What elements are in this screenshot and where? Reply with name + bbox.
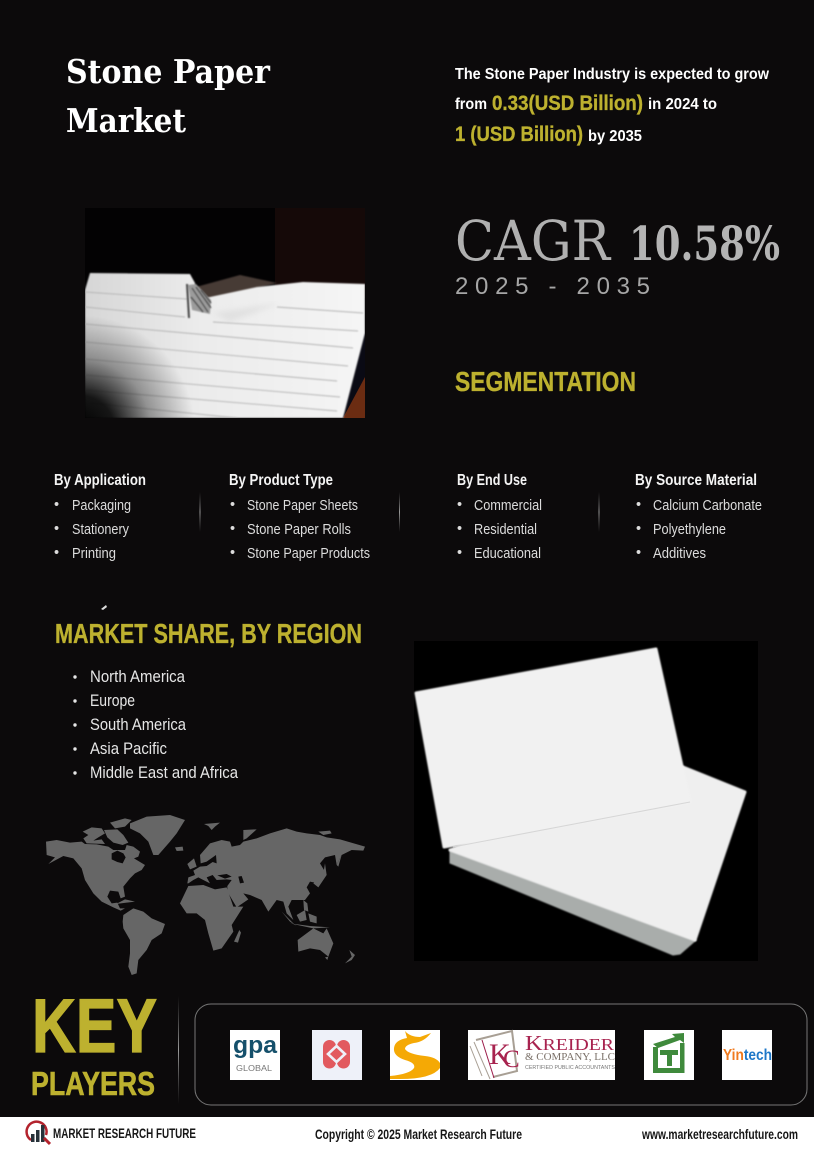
growth summary text: by 2035 <box>588 128 642 145</box>
icon: market research future magnifier <box>27 1122 50 1144</box>
segment column: by end use: Residential <box>474 522 537 538</box>
CAGR statistic <box>455 209 780 300</box>
CAGR statistic: 2025 - 2035 <box>455 273 650 300</box>
region list: Europe <box>90 691 135 710</box>
region list: North America <box>90 667 185 686</box>
segment column: by application: Packaging <box>72 498 131 514</box>
segment column: by product type: Stone Paper Products <box>247 546 370 562</box>
growth summary text: 1 (USD Billion) <box>455 123 583 146</box>
title: Market <box>66 101 187 140</box>
segment column: by product type: • <box>230 521 235 537</box>
CAGR statistic: CAGR <box>455 209 611 273</box>
logo: Kreider and Company: KREIDER <box>525 1031 615 1055</box>
segment column: by application: Stationery <box>72 522 130 538</box>
segment column: by source material <box>635 472 762 562</box>
logo: gpa global <box>230 1030 280 1080</box>
segment column: by end use: By End Use <box>457 472 527 489</box>
segment column: by source material: Additives <box>653 546 706 562</box>
photo: stacked blank stone paper cards <box>414 641 758 961</box>
heading: key players: PLAYERS <box>31 1065 155 1102</box>
logo: red diamond mark <box>312 1030 362 1080</box>
growth summary text: in 2024 to <box>648 96 717 113</box>
photo: creased stone paper sheet <box>85 208 365 420</box>
logo: Kreider and Company <box>468 1030 616 1080</box>
growth summary text: from <box>455 96 487 113</box>
segment column: by product type: • <box>230 545 235 561</box>
title <box>66 52 271 140</box>
key players panel <box>195 1004 807 1105</box>
logo: Yintech <box>722 1030 772 1080</box>
footer bar <box>0 1117 814 1150</box>
region list: Asia Pacific <box>90 739 167 758</box>
segment column: by end use: Educational <box>474 546 541 562</box>
heading: market share by region: MARKET SHARE, BY REGION <box>55 618 362 649</box>
segment column: by source material: • <box>636 497 641 513</box>
region list: Middle East and Africa <box>90 763 238 782</box>
logo: Kreider and Company: & COMPANY, LLC <box>525 1051 615 1063</box>
logo: Yintech: Yintech <box>723 1047 772 1064</box>
segment column: by source material: • <box>636 545 641 561</box>
heading: key players: KEY <box>32 984 157 1069</box>
segment column: by source material: • <box>636 521 641 537</box>
segment column: by source material: Polyethylene <box>653 522 726 538</box>
heading: key players <box>31 984 157 1102</box>
logo: gpa global: gpa <box>233 1032 278 1059</box>
footer brand: MARKET RESEARCH FUTURE <box>53 1125 196 1141</box>
logo: gpa global: GLOBAL <box>236 1064 273 1073</box>
segment column: by product type: • <box>230 497 235 513</box>
region list: South America <box>90 715 186 734</box>
growth summary text <box>455 66 770 146</box>
region list <box>73 667 238 782</box>
segment column: by product type: Stone Paper Sheets <box>247 498 358 514</box>
segment column: by end use: • <box>457 497 462 513</box>
segment column: by end use: • <box>457 545 462 561</box>
segment column: by application: • <box>54 497 59 513</box>
segment column: by end use <box>457 472 542 562</box>
logo: orange S <box>390 1030 440 1080</box>
title: Stone Paper <box>66 52 271 91</box>
segment column: by end use: Commercial <box>474 498 542 514</box>
growth summary text: The Stone Paper Industry is expected to grow <box>455 66 770 83</box>
growth summary text: 0.33(USD Billion) <box>492 92 643 115</box>
segment column: by source material: By Source Material <box>635 472 757 489</box>
logo: Kreider and Company: C <box>503 1046 520 1073</box>
heading: segmentation: SEGMENTATION <box>455 366 636 397</box>
segment column: by application: • <box>54 545 59 561</box>
segment column: by end use: • <box>457 521 462 537</box>
logo: Kreider and Company: CERTIFIED PUBLIC ACCOUNTANTS <box>525 1065 616 1071</box>
segment column: by application <box>54 472 146 562</box>
segment column: by product type: Stone Paper Rolls <box>247 522 351 538</box>
footer copyright: Copyright © 2025 Market Research Future <box>315 1126 522 1142</box>
world map <box>46 815 365 975</box>
logo: Kreider and Company: K <box>489 1038 511 1071</box>
segment column: by application: • <box>54 521 59 537</box>
segment column: by application: By Application <box>54 472 146 489</box>
logo: green T <box>644 1030 694 1080</box>
segment column: by product type <box>229 472 370 562</box>
segment column: by source material: Calcium Carbonate <box>653 498 762 514</box>
segment column: by application: Printing <box>72 546 116 562</box>
segment column: by product type: By Product Type <box>229 472 333 489</box>
